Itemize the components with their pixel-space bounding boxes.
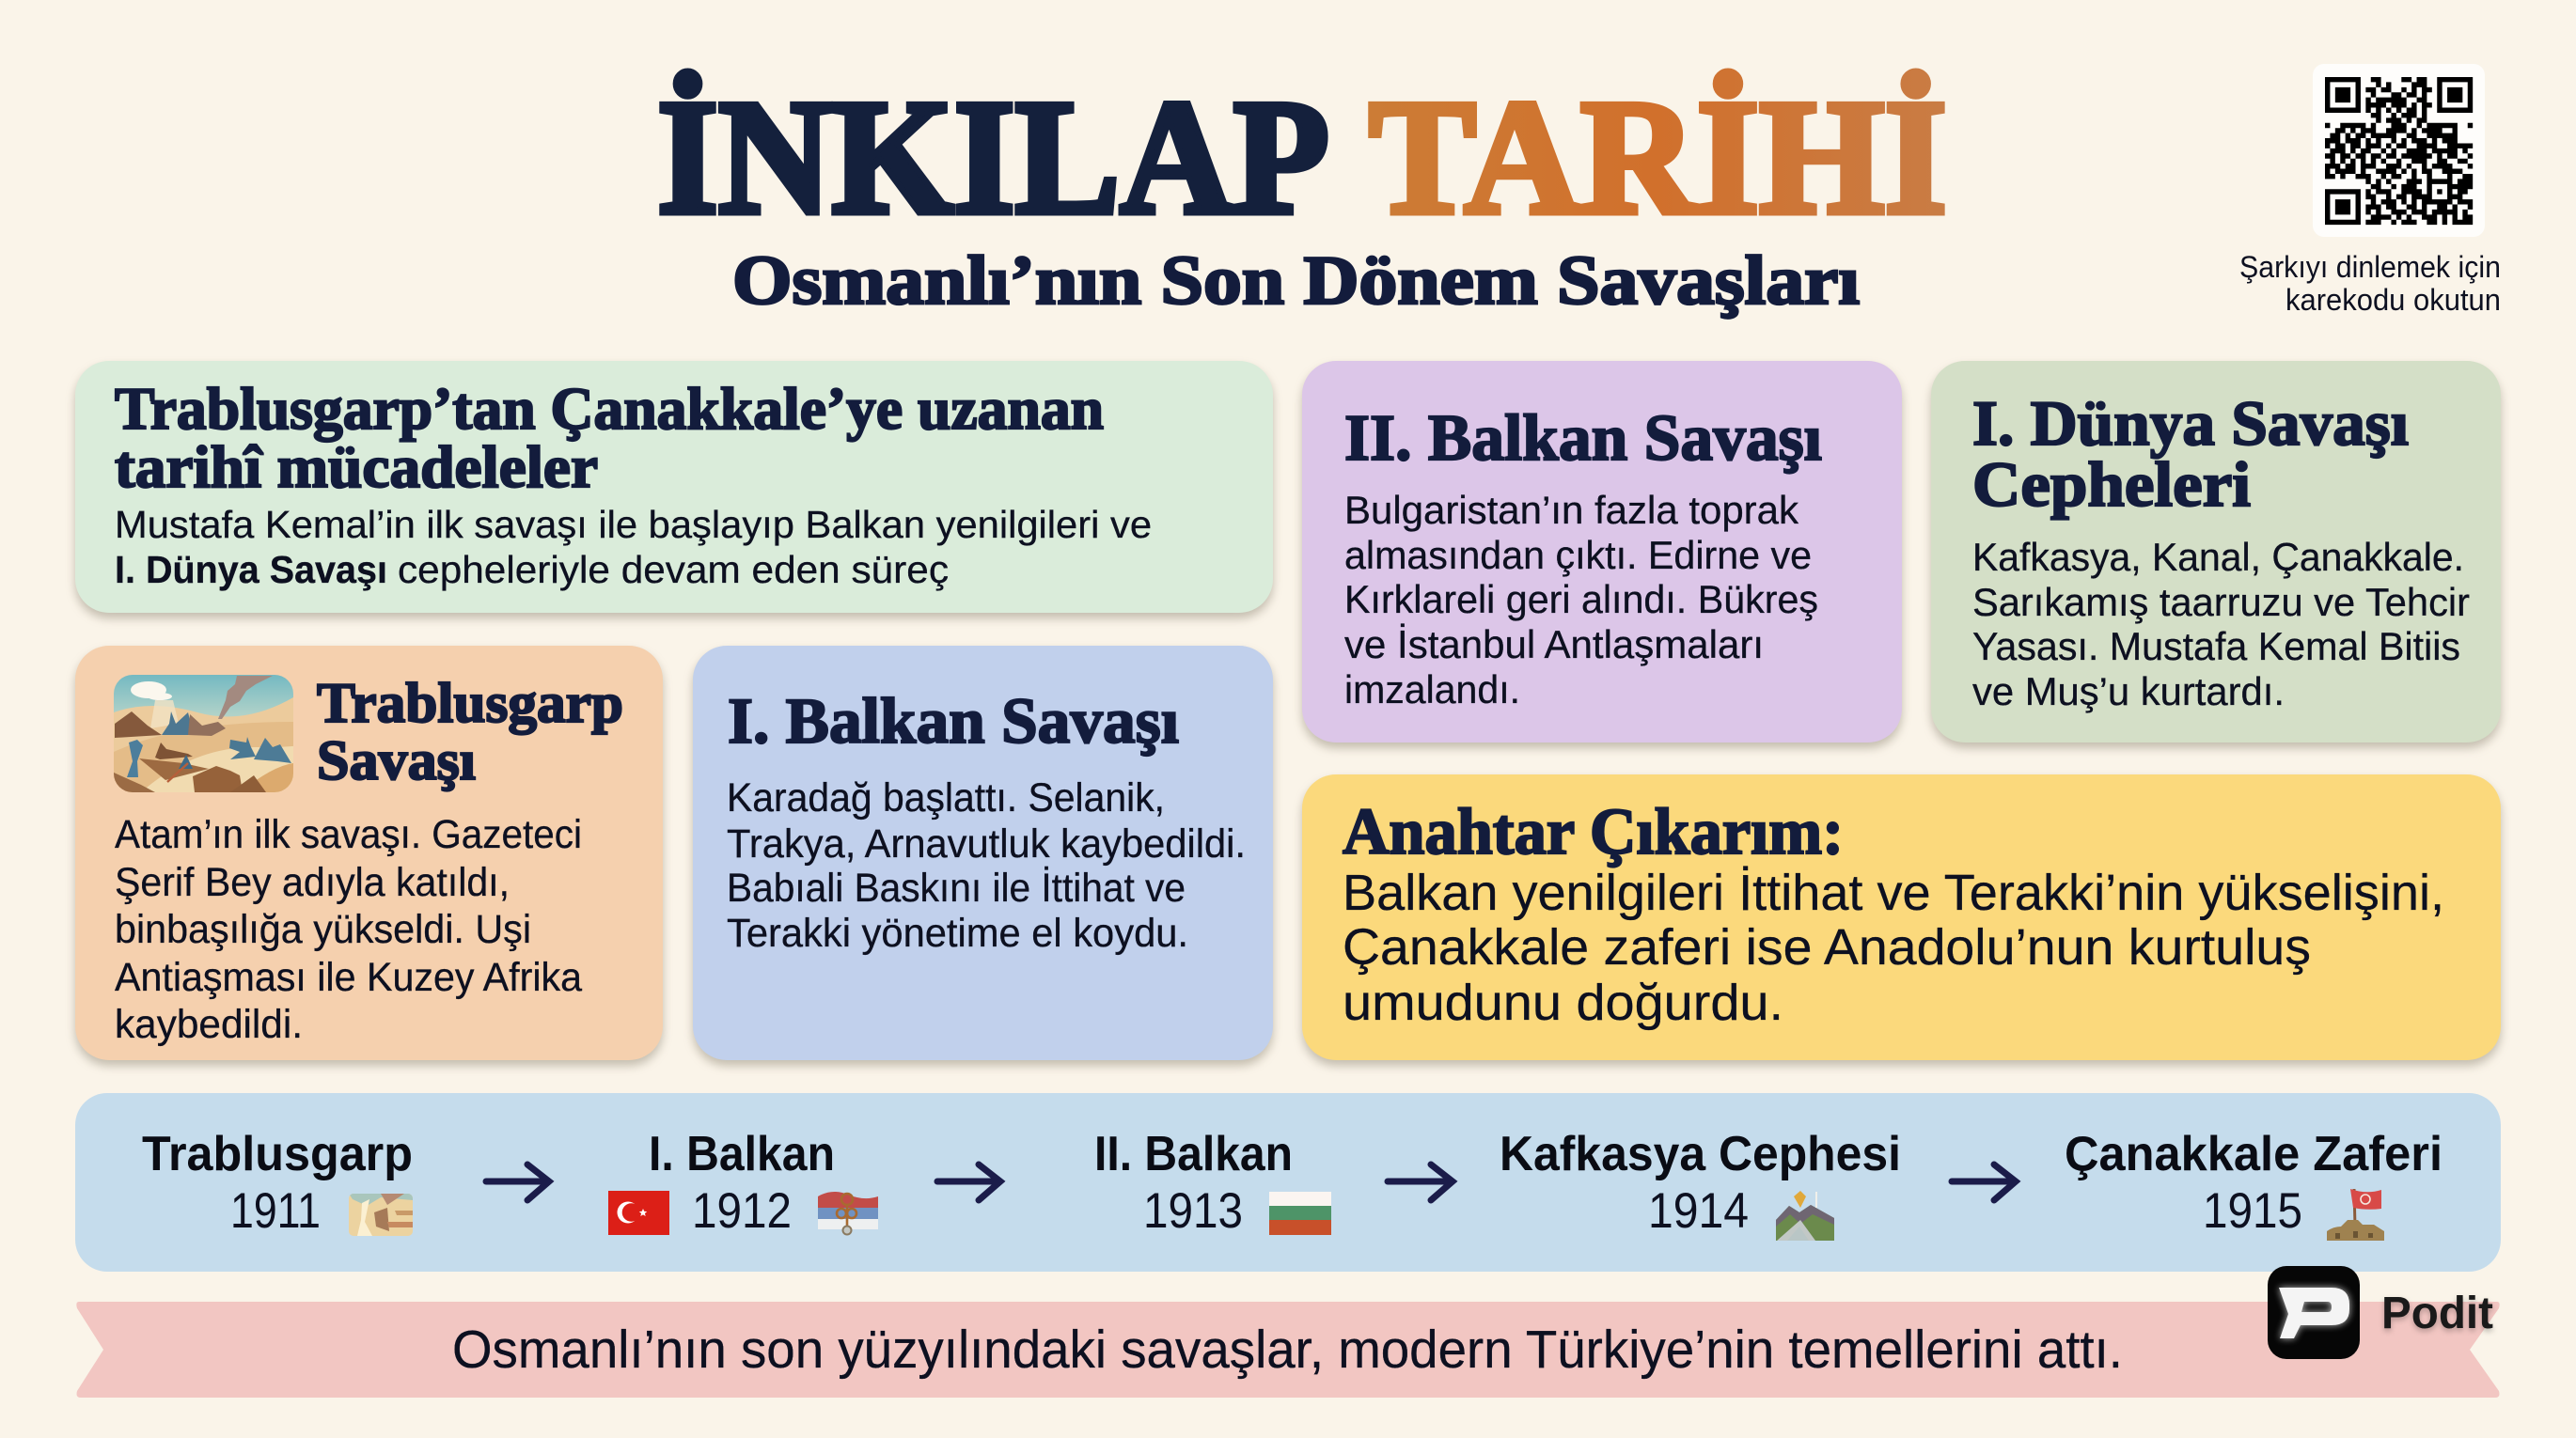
QR code: [2313, 64, 2485, 237]
panel: I. Dünya Savaşı Cepheleri: [1931, 361, 2501, 742]
panel: overview: [75, 361, 1273, 613]
logo wordmark: Podit: [2381, 1289, 2493, 1338]
overview text: Mustafa Kemal’in ilk savaşı ile başlayıp Balkan yenilgileri ve: [115, 503, 1152, 546]
body text: Karadağ başlattı. Selanik,: [727, 775, 1165, 821]
icon: flag on fort: [2327, 1189, 2384, 1241]
arrow: [937, 1164, 1000, 1200]
timeline item: II. Balkan 1913: [1094, 1127, 1331, 1239]
panel: timeline: [75, 1093, 2501, 1272]
timeline item: Çanakkale Zaferi 1915: 1915: [2203, 1183, 2302, 1239]
body text: Kırklareli geri alındı. Bükreş: [1344, 577, 1818, 621]
body text: Balkan yenilgileri İttihat ve Terakki’nin yükselişini,: [1343, 865, 2444, 921]
icon: Bulgarian flag: [1269, 1192, 1331, 1235]
arrow: [486, 1164, 549, 1200]
body text: [727, 775, 1246, 956]
panel: I. Balkan Savaşı: [693, 646, 1273, 1060]
body text: Sarıkamış taarruzu ve Tehcir: [1972, 580, 2470, 624]
heading: I. Dünya Savaşı: [1972, 387, 2409, 459]
panel: Anahtar Çıkarım: [1302, 774, 2501, 1060]
overview heading: Trablusgarp’tan Çanakkale’ye uzanan: [115, 376, 1104, 442]
heading: Anahtar Çıkarım:: [1343, 796, 1844, 868]
body text: [115, 812, 582, 1047]
overview text: cepheleriyle devam eden süreç: [398, 548, 949, 591]
ribbon: conclusion: [76, 1302, 2500, 1398]
timeline item: I. Balkan 1912: 1912: [692, 1183, 792, 1239]
ribbon: conclusion: Osmanlı’nın son yüzyılındaki savaşlar, modern Türkiye’nin temellerini attı.: [452, 1320, 2123, 1380]
timeline item: Kafkasya Cephesi 1914: 1914: [1648, 1183, 1749, 1239]
body text: Şerif Bey adıyla katıldı,: [115, 860, 510, 905]
timeline item: Trablusgarp 1911: Trablusgarp: [142, 1127, 413, 1181]
overview text: I. Dünya Savaşı: [115, 548, 387, 591]
illustration: desert battle: [114, 675, 299, 792]
timeline item: Kafkasya Cephesi 1914: Kafkasya Cephesi: [1500, 1127, 1901, 1181]
timeline item: II. Balkan 1913: 1913: [1143, 1183, 1243, 1239]
body text: [1343, 865, 2444, 1031]
QR caption: [2239, 250, 2501, 317]
QR code block: [2239, 64, 2501, 317]
heading: Savaşı: [317, 729, 476, 791]
body text: Yasası. Mustafa Kemal Bitiis: [1972, 624, 2460, 668]
panel: II. Balkan Savaşı: [1302, 361, 1902, 742]
heading: I. Balkan Savaşı: [728, 685, 1179, 757]
heading: II. Balkan Savaşı: [1344, 402, 1822, 475]
heading: [317, 672, 623, 791]
body text: [1972, 535, 2470, 713]
icon: desert: [349, 1194, 413, 1236]
panel: Trablusgarp Savaşı: [75, 646, 663, 1060]
timeline item: Trablusgarp 1911: [142, 1127, 413, 1239]
body text: Babıali Baskını ile İttihat ve: [727, 866, 1186, 911]
timeline item: Çanakkale Zaferi 1915: [2065, 1127, 2442, 1241]
body text: Antiaşması ile Kuzey Afrika: [115, 955, 582, 1000]
heading: Trablusgarp: [317, 672, 623, 734]
timeline item: I. Balkan 1912: I. Balkan: [649, 1127, 835, 1181]
body text: Atam’ın ilk savaşı. Gazeteci: [115, 812, 582, 857]
body text: Trakya, Arnavutluk kaybedildi.: [727, 821, 1246, 867]
body text: Kafkasya, Kanal, Çanakkale.: [1972, 535, 2464, 579]
icon: mountain: [1776, 1191, 1834, 1241]
body text: almasından çıktı. Edirne ve: [1344, 533, 1812, 577]
logo: Podit: [2268, 1266, 2493, 1359]
body text: binbaşılığa yükseldi. Uşi: [115, 907, 531, 952]
arrow: [1388, 1164, 1453, 1200]
timeline item: Kafkasya Cephesi 1914: [1500, 1127, 1901, 1241]
overview heading: [115, 376, 1104, 500]
heading: Cepheleri: [1972, 448, 2251, 520]
overview heading: tarihî mücadeleler: [115, 434, 598, 500]
title: [657, 66, 1947, 248]
body text: imzalandı.: [1344, 667, 1520, 711]
overview text: [115, 503, 1152, 591]
title: İNKILAP: [657, 66, 1329, 248]
body text: kaybedildi.: [115, 1002, 303, 1047]
body text: ve İstanbul Antlaşmaları: [1344, 622, 1764, 666]
QR caption: karekodu okutun: [2285, 283, 2501, 317]
QR caption: Şarkıyı dinlemek için: [2239, 250, 2501, 284]
subtitle: Osmanlı’nın Son Dönem Savaşları: [732, 242, 1860, 320]
icon: Turkish flag: [608, 1191, 669, 1235]
body text: [1344, 488, 1818, 711]
body text: Terakki yönetime el koydu.: [727, 911, 1188, 956]
heading: [1972, 387, 2409, 520]
timeline item: Çanakkale Zaferi 1915: Çanakkale Zaferi: [2065, 1127, 2442, 1181]
timeline item: I. Balkan 1912: [608, 1127, 878, 1239]
body text: umudunu doğurdu.: [1343, 975, 1783, 1031]
body text: Bulgaristan’ın fazla toprak: [1344, 488, 1799, 532]
timeline item: Trablusgarp 1911: 1911: [230, 1183, 321, 1239]
logo icon: [2268, 1266, 2360, 1359]
body text: Çanakkale zaferi ise Anadolu’nun kurtuluş: [1343, 919, 2311, 976]
body text: ve Muş’u kurtardı.: [1972, 669, 2285, 713]
arrow: [1952, 1164, 2016, 1200]
icon: Serbian flag: [818, 1192, 878, 1235]
timeline item: II. Balkan 1913: II. Balkan: [1094, 1127, 1293, 1181]
title: TARİHİ: [1369, 66, 1947, 248]
